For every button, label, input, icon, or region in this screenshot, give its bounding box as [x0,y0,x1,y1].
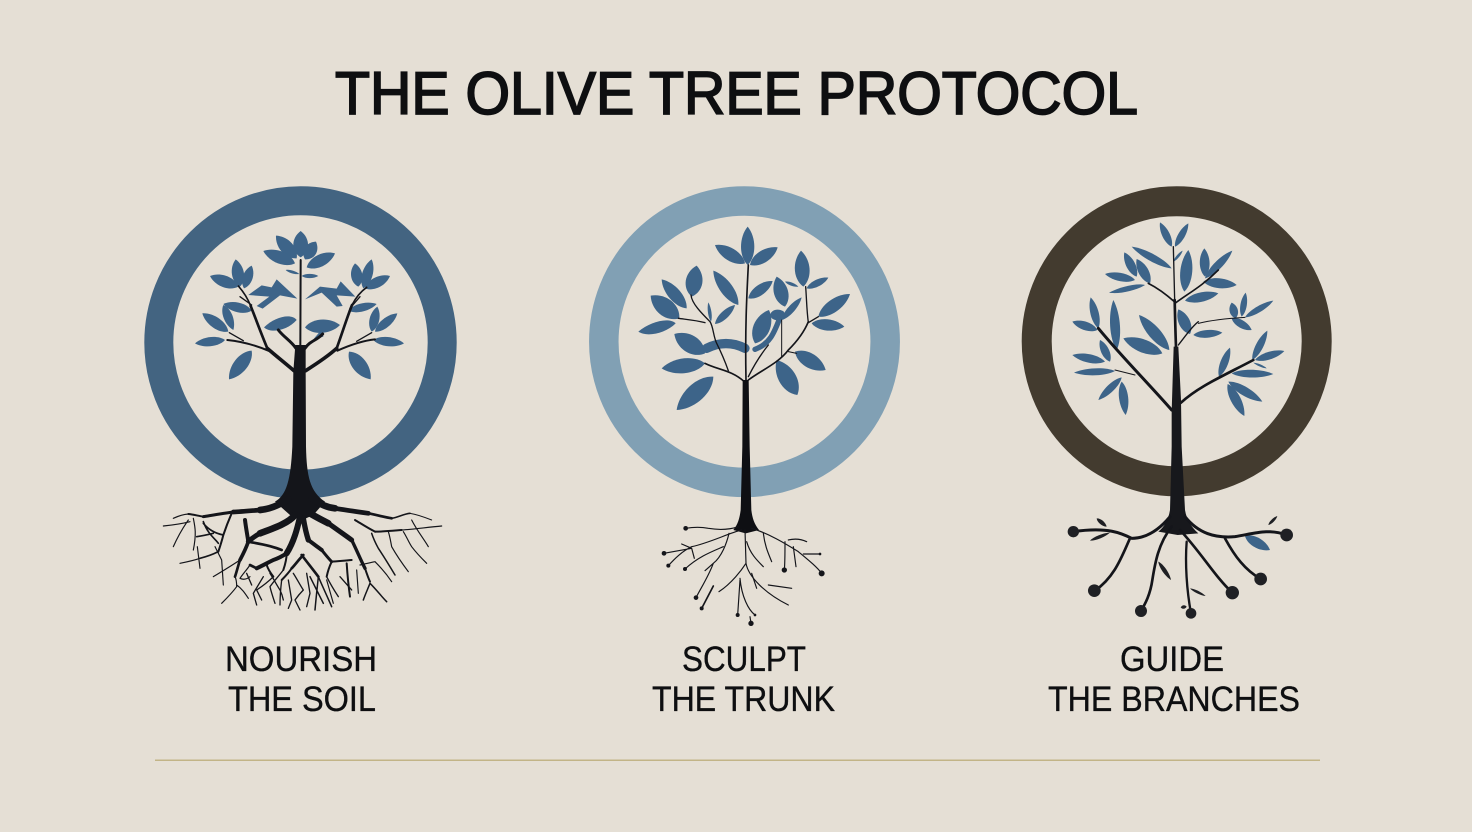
label: sculpt the trunk: THE TRUNK [652,680,835,719]
tree: bulb roots [1068,221,1293,619]
roots [163,498,442,610]
label: nourish the soil: THE SOIL [228,680,376,719]
root tips [662,526,825,626]
leaves [637,227,854,416]
trunk [1158,347,1198,535]
tree: dense roots [163,231,442,610]
label: guide the branches: GUIDE [1120,640,1224,679]
label: sculpt the trunk: SCULPT [682,640,806,679]
panel: guide the branches [1037,201,1317,719]
label: guide the branches [1048,640,1300,719]
ring: dark blue [159,201,442,484]
roots [664,527,822,623]
branches [227,260,375,371]
branches [678,265,818,382]
leaves [1071,221,1285,554]
ring: light blue [604,201,885,482]
trunk [275,345,325,521]
branches [1098,247,1253,410]
tree: sparse dotted roots [637,227,854,626]
ring: dark brown [1037,201,1317,481]
trunk [733,380,759,533]
label: nourish the soil [225,640,377,719]
label: guide the branches: THE BRANCHES [1048,680,1300,719]
label: nourish the soil: NOURISH [225,640,377,679]
title: THE OLIVE TREE PROTOCOL [335,60,1138,127]
divider line [155,760,1320,761]
roots [1073,517,1287,613]
panel: sculpt the trunk [604,201,885,719]
root tips and root leaves [1068,515,1293,619]
label: sculpt the trunk [652,640,835,719]
panel: nourish the soil [159,201,442,719]
leaves [194,231,405,384]
